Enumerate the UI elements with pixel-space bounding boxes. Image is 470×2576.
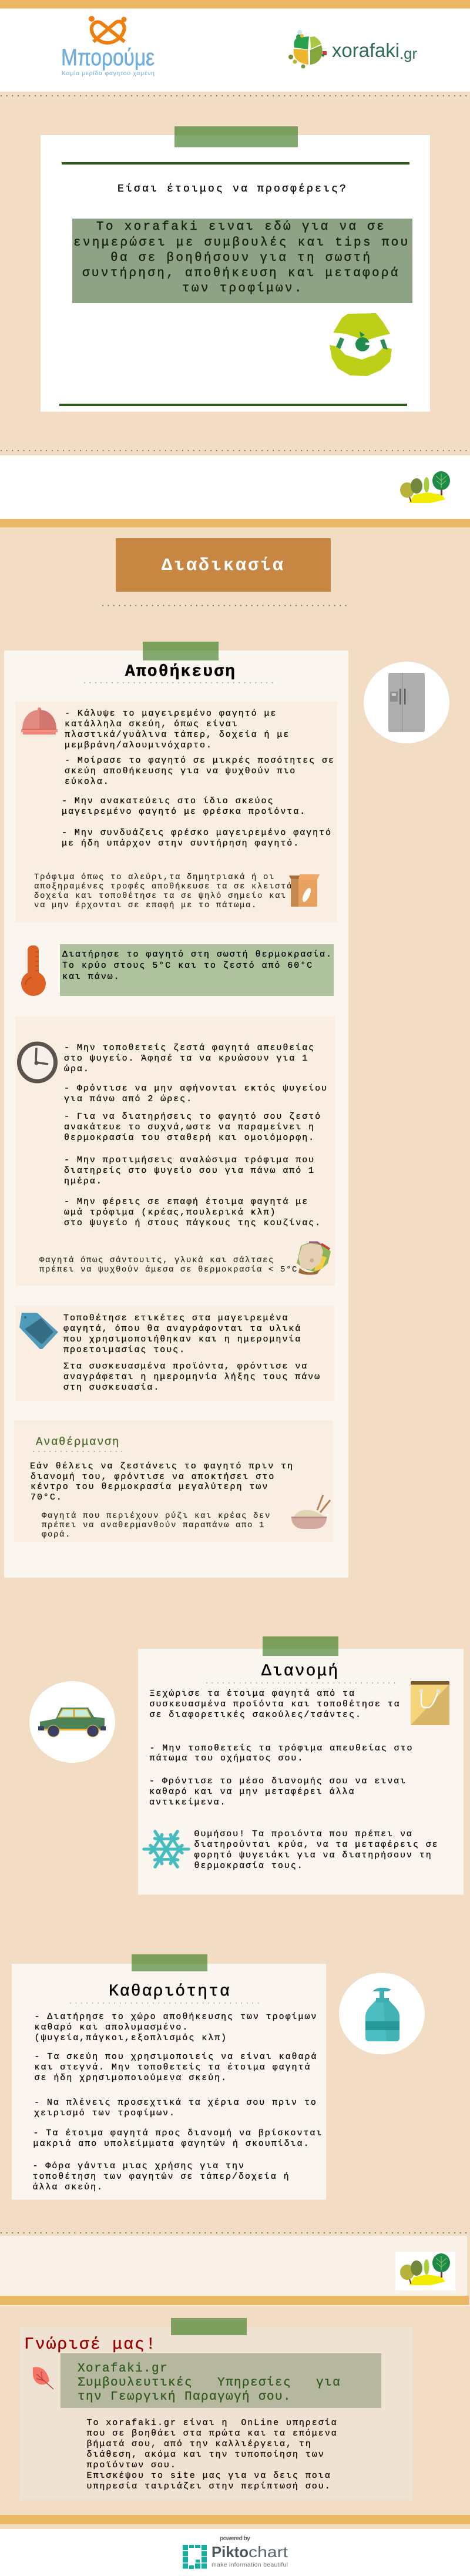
text: distribution tips: Ξεχώρισε τα έτοιμα φαγητά από τα	[149, 1689, 355, 1699]
tape	[174, 126, 298, 147]
text: reheating tips: 70°C.	[31, 1492, 63, 1502]
footer: Piktochart credit: make information beautiful	[212, 2561, 288, 2568]
footer: Piktochart credit	[183, 2535, 288, 2569]
icon: Piktochart logo	[183, 2545, 207, 2569]
text: reminder: θερμοκρασία τους.	[194, 1861, 304, 1871]
text: storage tips: - Μοίρασε το φαγητό σε μικρές ποσότητες σε	[65, 756, 335, 766]
icon: clock	[19, 1044, 55, 1081]
text: cooling tips: θερμοκρασία του σταθερή και ομοιόμορφη.	[64, 1133, 315, 1143]
text: hygiene tips: σε ήδη χρησιμοποιούμενα σκεύη.	[34, 2073, 227, 2083]
text: hygiene tips: και στεγνά. Μην τοποθετείς τα έτοιμα φαγητά	[34, 2062, 311, 2072]
text: hygiene tips: χειρισμό των τροφίμων.	[34, 2108, 176, 2118]
text: reminder: Θυμήσου! Τα προιόντα που πρέπει να	[194, 1829, 413, 1839]
icon: sandwich	[297, 1242, 331, 1275]
logo: Μπορούμε	[61, 16, 155, 77]
text: cooling tips	[64, 1043, 328, 1228]
text: cooling tips: ώρα.	[64, 1064, 90, 1074]
text: distribution tips: σε διαφορετικές σακούλες/τσάντες.	[149, 1710, 362, 1720]
logo: Μπορούμε: Μπορούμε	[61, 45, 155, 71]
text: dry goods note: δοχεία και τοποθέτησε τα σε ψηλό σημείο και	[34, 891, 287, 901]
heading: Διαδικασία: Διαδικασία	[162, 556, 285, 576]
logo: xorafaki.gr: xorafaki	[332, 39, 400, 61]
tape	[263, 1636, 338, 1656]
text: storage tips: μεμβράνη/αλουμινόχαρτο.	[65, 740, 213, 750]
text: dry goods note: αποξηραμένες τροφές αποθήκευσε τα σε κλειστά	[34, 882, 293, 891]
sub-panel: reheating	[14, 1420, 333, 1542]
panel: Καθαριότητα	[12, 1954, 326, 2200]
text: sandwich note	[39, 1256, 298, 1274]
text: reminder: διατηρούνται κρύα, να τα μεταφέρεις σε	[194, 1840, 439, 1850]
callout: correct temperature: και πάνω.	[62, 972, 120, 982]
text: about: διάθεση, ακόμα και την τυποποίηση των	[87, 2450, 325, 2460]
text: dry goods note: Τρόφιμα όπως το αλεύρι,τα δημητριακά ή οι	[34, 873, 275, 882]
text: about: που σε βοηθάει στα πρώτα και τα επόμενα	[87, 2429, 338, 2439]
text: hygiene tips: μακριά απο υπολείμματα φαγητών ή σκουπίδια.	[33, 2139, 310, 2149]
tape	[143, 642, 219, 660]
text: hygiene tips: - Φόρα γάντια μιας χρήσης για την	[33, 2161, 245, 2171]
heading: Γνώρισέ μας: Γνώρισέ μας!	[24, 2336, 157, 2354]
text: hygiene tips: (ψυγεία,πάγκοι,εξοπλισμός κλπ)	[34, 2033, 227, 2043]
footer: Piktochart credit: Pikto	[212, 2543, 249, 2561]
text: storage tips	[62, 709, 335, 848]
text: storage tips: εύκολα.	[65, 777, 110, 787]
icon: thermometer	[21, 945, 46, 996]
text: label tips: που χρησιμοποιήθηκαν και η ημερομηνία	[63, 1334, 301, 1344]
text: hygiene tips	[33, 2012, 323, 2192]
text: about	[87, 2418, 338, 2491]
text: reminder: φορητό ψυγειάκι για να διατηρήσουν τη	[194, 1850, 432, 1860]
tape	[132, 1954, 207, 1971]
text: label tips: στη συσκευασία.	[63, 1383, 160, 1393]
callout: correct temperature: Διατήρησε το φαγητό στη σωστή θερμοκρασία.	[62, 950, 333, 960]
text: reheating tips	[30, 1461, 294, 1502]
text: storage tips: πλαστικά/γυάλινα τάπερ, δοχεία ή με	[65, 730, 290, 740]
text: distribution tips: αντικείμενα.	[149, 1797, 226, 1807]
icon: trees	[400, 471, 450, 503]
text: rice note: φορά.	[42, 1530, 71, 1539]
text: cooling tips: στο ψυγείο. Άφησέ τα να κρυώσουν για 1	[64, 1054, 308, 1064]
sub-panel: cooling tips	[15, 1017, 335, 1286]
text: label tips	[63, 1313, 321, 1393]
text: cooling tips: - Μην προτιμήσεις αναλώσιμα τρόφιμα που	[64, 1155, 315, 1165]
text: reheating tips: κέντρο του θερμοκρασία μεγαλύτερη των	[31, 1482, 268, 1492]
text: cooling tips: ανακάτευε το συχνά,ωστε να παραμείνει η	[64, 1122, 315, 1132]
heading: Καθαριότητα: Καθαριότητα	[109, 1983, 231, 2001]
icon: shopping bag	[411, 1681, 449, 1725]
text: hygiene tips: - Τα σκεύη που χρησιμοποιείς να είναι καθαρά	[34, 2052, 317, 2062]
logo: Μπορούμε: Καμία μερίδα φαγητού χαμένη	[62, 70, 155, 77]
callout: Xorafaki services: Συμβουλευτικές Υπηρεσίες για	[78, 2376, 341, 2390]
band: trees footer	[0, 2236, 467, 2296]
text: storage tips: σκεύη αποθήκευσης για να ψυχθούν πιο	[65, 766, 296, 776]
icon: snowflake	[144, 1830, 189, 1869]
callout: Xorafaki services: την Γεωργική Παραγωγή σου.	[78, 2390, 291, 2404]
icon: label tag	[19, 1313, 58, 1349]
icon: hands holding apple	[330, 313, 392, 376]
text: storage tips: - Μην ανακατεύεις στο ίδιο σκεύος	[62, 796, 274, 806]
callout: Xorafaki services: Xorafaki.gr	[78, 2362, 168, 2376]
text: label tips: αναγράφεται η ημερομηνία λήξης τους πάνω	[63, 1372, 321, 1382]
footer: Piktochart credit: chart	[249, 2543, 288, 2561]
text: storage tips: μαγειρεμένο φαγητό με φρέσκα προϊόντα.	[62, 807, 306, 817]
heading: Αναθέρμανση: Αναθέρμανση	[36, 1435, 120, 1448]
text: about: προϊόντων σου.	[87, 2460, 177, 2470]
text: storage tips: - Μην συνδυάζεις φρέσκο μαγειρεμένο φαγητό	[62, 828, 332, 838]
text: dry goods note: να μην έρχονται σε επαφή με το πάτωμα.	[34, 901, 257, 910]
logo: xorafaki.gr	[288, 30, 417, 68]
text: about: Επισκέψου το site μας για να δεις ποια	[87, 2471, 331, 2481]
text: label tips: Τοποθέτησε ετικέτες στα μαγειρεμένα	[63, 1313, 288, 1323]
text: label tips: Στα συσκευασμένα προϊόντα, φρόντισε να	[63, 1361, 308, 1371]
text: label tips: προετοιμασίας τους.	[63, 1345, 186, 1355]
text: distribution tips: συσκευασμένα προϊόντα και τοποθέτησε τα	[149, 1699, 401, 1709]
text: about: Το xorafaki.gr είναι η OnLine υπηρεσία	[87, 2418, 338, 2428]
text: about: υπηρεσία ταιριάζει στην περίπτωσή σου.	[87, 2481, 331, 2491]
text: distribution tips: πάτωμα του οχήματος σου.	[149, 1753, 304, 1763]
heading: Διανομή: Διανομή	[261, 1662, 339, 1681]
text: hygiene tips: άλλα σκεύη.	[33, 2182, 103, 2192]
text: dry goods note	[34, 873, 293, 910]
text: reheating tips: διανομή του, φρόντισε να αποκτήσει στο	[31, 1472, 275, 1482]
heading: intro question: Είσαι έτοιμος να προσφέρεις?	[118, 183, 348, 195]
text: cooling tips: διατηρείς στο ψυγείο σου για πάνω από 1	[64, 1166, 315, 1176]
text: hygiene tips: - Τα έτοιμα φαγητά προς διανομή να βρίσκονται	[33, 2128, 323, 2138]
text: cooling tips: - Φρόντισε να μην αφήνονται εκτός ψυγείου	[64, 1084, 328, 1094]
sub-panel: labels	[15, 1306, 334, 1401]
text: distribution tips: - Φρόντισε το μέσο διανομής σου να ειναι	[149, 1776, 407, 1786]
text: cooling tips: στο ψυγείο ή στους πάγκους της κουζίνας.	[64, 1218, 321, 1228]
text: hygiene tips: - Να πλένεις προσεχτικά τα χέρια σου πριν το	[34, 2098, 317, 2108]
callout: intro text: Το xorafaki ειναι εδώ για να σε	[96, 220, 386, 234]
callout: Xorafaki services	[61, 2353, 381, 2408]
text: sandwich note: Φαγητά όπως σάντουιτς, γλυκά και σάλτσες	[39, 1256, 274, 1265]
text: cooling tips: - Για να διατηρήσεις το φαγητό σου ζεστό	[64, 1112, 321, 1122]
text: storage tips: κατάλληλα σκεύη, όπως είναι	[65, 719, 239, 729]
text: storage tips: με ήδη υπάρχον στην συντήρηση φαγητό.	[62, 838, 300, 848]
text: rice note: Φαγητά που περιέχουν ρύζι και κρέας δεν	[42, 1511, 271, 1521]
text: distribution tips: καθαρό και να μην μεταφέρει άλλα	[149, 1787, 355, 1797]
text: distribution tips	[149, 1689, 414, 1807]
callout: intro text: θα σε βοηθήσουν για τη σωστή	[110, 251, 372, 265]
panel: Αποθήκευση	[4, 642, 348, 1578]
icon: food dome	[21, 707, 58, 734]
callout: intro text	[72, 219, 412, 303]
callout: intro text: συντήρηση, αποθήκευση και μεταφορά	[82, 267, 400, 280]
text: about: βήματά σου, από την καλλιέργεια, τη	[87, 2439, 312, 2449]
text: hygiene tips: καθαρό και απολυμασμένο.	[34, 2022, 189, 2032]
text: cooling tips: για πάνω από 2 ώρες.	[64, 1094, 193, 1104]
icon: leaf	[33, 2367, 53, 2389]
callout: correct temperature	[60, 944, 334, 996]
callout: correct temperature: Το κρύο στους 5°C και το ζεστό από 60°C	[62, 961, 313, 971]
text: sandwich note: πρέπει να ψυχθούν άμεσα σε θερμοκρασία < 5°C	[39, 1265, 298, 1274]
tape	[171, 2318, 247, 2335]
icon: rice bowl	[291, 1495, 330, 1529]
panel: Διανομή	[138, 1636, 464, 1894]
icon: car badge	[29, 1681, 115, 1763]
icon: trees	[400, 2253, 450, 2285]
text: cooling tips: - Μην τοποθετείς ζεστά φαγητά απευθείας	[64, 1043, 315, 1053]
text: cooling tips: - Μην φέρεις σε επαφή έτοιμα φαγητά με	[64, 1197, 308, 1207]
panel: Γνώρισέ μας	[19, 2318, 412, 2500]
text: cooling tips: ημέρα.	[64, 1176, 103, 1186]
heading: Διαδικασία	[116, 538, 331, 592]
icon: flour bag	[289, 874, 320, 907]
text: rice note	[42, 1511, 271, 1539]
panel: intro	[41, 126, 430, 411]
callout: intro text: των τροφίμων.	[182, 282, 304, 296]
icon: soap badge	[339, 1973, 425, 2054]
text: distribution tips: - Μην τοποθετείς τα τρόφιμα απευθείας στο	[149, 1743, 414, 1753]
text: hygiene tips: τοποθέτηση των φαγητών σε τάπερ/δοχεία ή	[33, 2172, 290, 2182]
text: rice note: πρέπει να αναθερμανθούν παραπάνω απο 1	[42, 1521, 265, 1530]
text: reheating tips: Εάν θέλεις να ζεστάνεις το φαγητό πριν τη	[30, 1461, 294, 1471]
icon: fridge badge	[364, 662, 449, 743]
text: hygiene tips: - Διατήρησε το χώρο αποθήκευσης των τροφίμων	[34, 2012, 317, 2022]
text: storage tips: - Κάλυψε το μαγειρεμένο φαγητό με	[65, 709, 277, 719]
text: cooling tips: ωμά τρόφιμα (κρέας,πουλερικά κλπ)	[64, 1208, 276, 1217]
text: reminder	[194, 1829, 439, 1871]
sub-panel: storage tips	[15, 702, 337, 923]
text: label tips: φαγητά, όπου θα αναγράφονται τα υλικά	[63, 1324, 301, 1334]
footer: Piktochart credit: powered by	[220, 2535, 250, 2542]
logo: xorafaki.gr: .gr	[400, 45, 417, 62]
callout: intro text: ενημερώσει με συμβουλές και tips που	[73, 236, 409, 250]
heading: Αποθήκευση: Αποθήκευση	[125, 663, 236, 681]
